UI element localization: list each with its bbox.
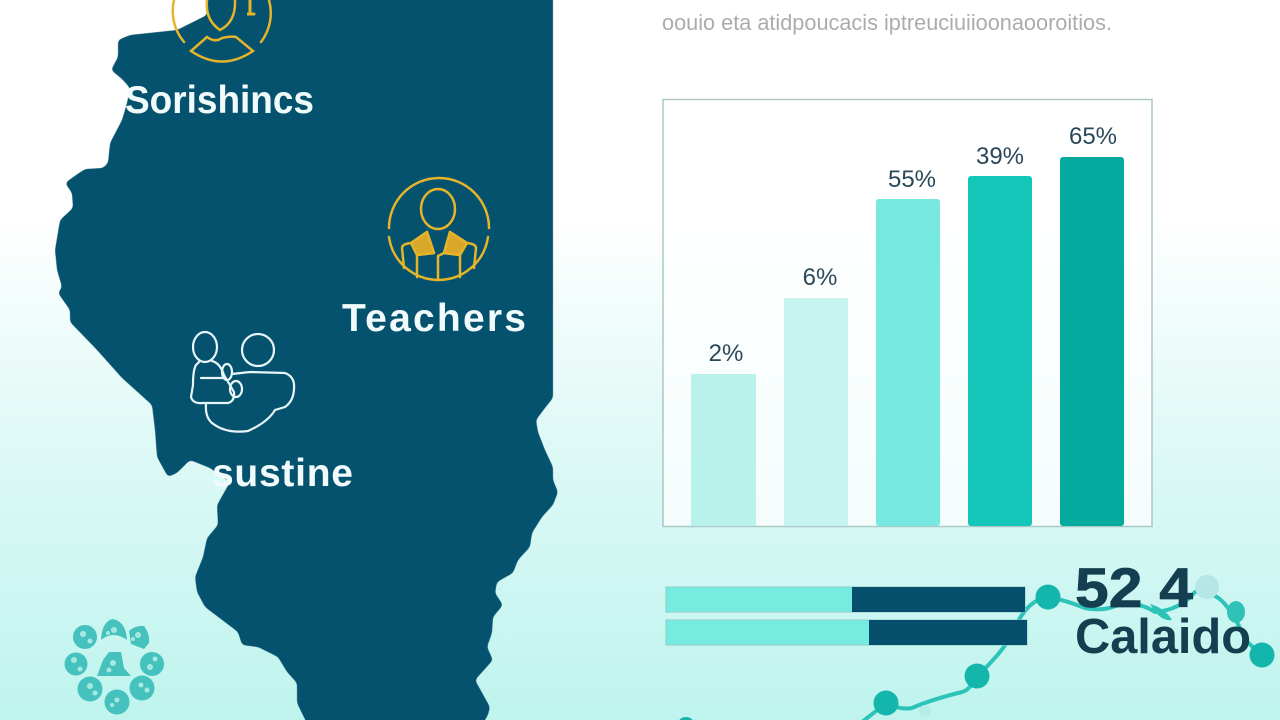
stacked bar 1 bbox=[666, 587, 1025, 612]
icon: graduate in gold ring bbox=[173, 0, 271, 62]
stat label: Calaido bbox=[1075, 610, 1251, 664]
bar chart: 65% bbox=[1069, 123, 1117, 150]
bar chart bbox=[691, 123, 1124, 526]
chart panel frame bbox=[663, 100, 1152, 526]
bar chart: 39% bbox=[976, 143, 1024, 170]
bar chart: 6% bbox=[803, 264, 837, 291]
trend line with dots bbox=[677, 575, 1274, 720]
bar chart: 2% bbox=[709, 340, 743, 367]
icon: parent and child outline bbox=[191, 332, 294, 432]
label: bottom group: sustine bbox=[212, 452, 353, 495]
bar chart: 55% bbox=[888, 166, 936, 193]
stacked bar 2 bbox=[666, 620, 1027, 645]
intro text: oouio eta atidpoucacis iptreuciuiioonaooroitios. bbox=[662, 10, 1112, 35]
icon: ring of teal community badges bbox=[64, 619, 164, 714]
label: Teachers: Teachers bbox=[342, 297, 526, 340]
label: top group: Sorishincs bbox=[125, 79, 314, 122]
icon: teacher in gold ring bbox=[389, 178, 489, 280]
map silhouette bbox=[55, 0, 558, 720]
big number stat: 52 4 bbox=[1075, 556, 1193, 619]
